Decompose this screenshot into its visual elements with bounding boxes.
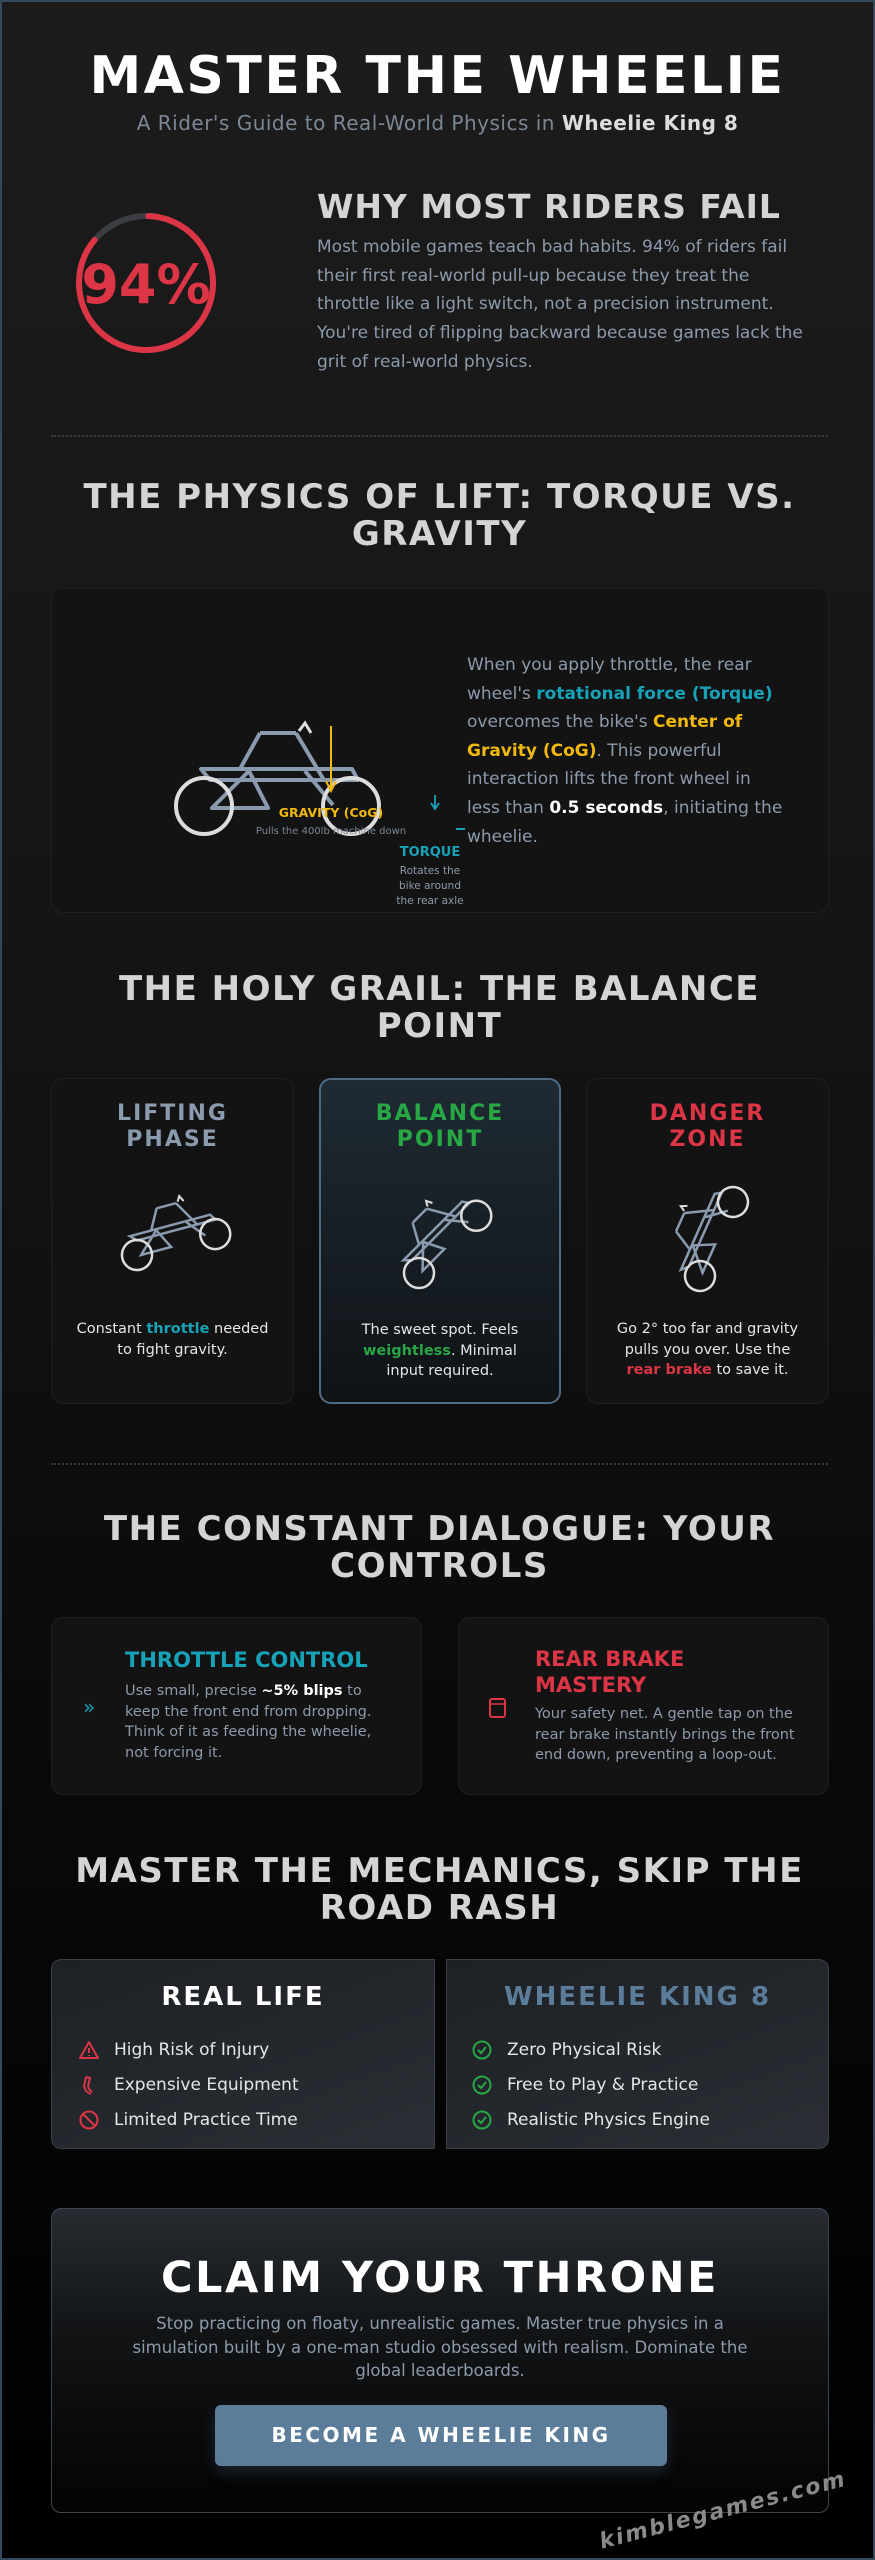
panel: CTA	[51, 2208, 829, 2513]
card text: Constant throttle needed to fight gravity.	[77, 1321, 268, 1358]
heading: master the mechanics: ROAD RASH	[320, 1888, 559, 1928]
arrow: torque: bike around	[399, 880, 461, 892]
arrow: gravity: Pulls the 400lb machine down	[256, 826, 406, 837]
panel: rear brake: Your safety net. A gentle tap on the rear brake instantly brings the front end down, preventing a loop-out.	[535, 1706, 795, 1763]
panel: danger zone	[586, 1078, 829, 1404]
text: physics explanation: When you apply throttle, the rear wheel's rotational force (Torque) overcomes the bike's Center of Gravity (CoG). This powerful interaction lifts the front wheel in less than 0.5 seconds, initiating the wheelie.	[467, 655, 782, 847]
heading: physics of lift	[83, 477, 796, 554]
title: MASTER THE WHEELIE	[89, 46, 786, 106]
arrow: torque: TORQUE	[400, 845, 460, 860]
stat ring 94%	[76, 213, 216, 353]
icon: chevrons: »	[83, 1695, 95, 1719]
panel: danger zone: DANGER	[650, 1101, 765, 1126]
panel: wheelie king 8	[446, 1959, 829, 2149]
heading: holy grail	[119, 969, 760, 1046]
heading: holy grail: POINT	[377, 1006, 502, 1046]
list: real life: Limited Practice Time	[114, 2110, 298, 2130]
diagram: bike with forces	[174, 720, 465, 907]
heading: physics of lift: GRAVITY	[352, 514, 527, 554]
card title	[117, 1101, 228, 1152]
list: wheelie king: Free to Play & Practice	[507, 2074, 698, 2094]
watermark: kimblegames.com	[597, 2467, 849, 2555]
list: real life: High Risk of Injury	[114, 2040, 269, 2060]
icon: brake	[489, 1698, 506, 1718]
button	[215, 2405, 667, 2466]
list: wheelie king: Realistic Physics Engine	[507, 2110, 710, 2130]
arrow: gravity	[256, 726, 406, 837]
panel: real life: REAL LIFE	[161, 1982, 325, 2012]
icon: bike lifting	[120, 1194, 232, 1272]
panel: lifting phase	[51, 1078, 294, 1404]
panel: physics	[51, 588, 829, 913]
heading: holy grail: THE HOLY GRAIL: THE BALANCE	[119, 969, 760, 1009]
heading: master the mechanics: MASTER THE MECHANICS, SKIP THE	[75, 1851, 804, 1891]
heading: constant dialogue: CONTROLS	[330, 1546, 549, 1586]
heading: constant dialogue	[104, 1509, 775, 1586]
arrow: torque	[396, 795, 465, 907]
card title: PHASE	[126, 1127, 219, 1152]
panel: rear brake	[458, 1617, 829, 1795]
panel: real life	[51, 1959, 435, 2149]
list: real life: Expensive Equipment	[114, 2074, 299, 2094]
panel: rear brake: MASTERY	[535, 1673, 646, 1697]
CTA heading: CLAIM YOUR THRONE	[161, 2253, 719, 2303]
panel: danger zone: Go 2° too far and gravity pulls you over. Use the rear brake to save it.	[617, 1321, 798, 1378]
panel: balance point	[319, 1078, 561, 1404]
icon: bike balanced	[400, 1199, 492, 1290]
text: why fail paragraph: Most mobile games teach bad habits. 94% of riders fail their first real-world pull-up because they treat the throttle like a light switch, not a precision instrument. You're tired of flipping backward because games lack the grit of real-world physics.	[317, 237, 803, 372]
heading: why most riders fail: WHY MOST RIDERS FAIL	[317, 187, 781, 226]
heading: constant dialogue: THE CONSTANT DIALOGUE: YOUR	[104, 1509, 775, 1549]
panel: danger zone: ZONE	[669, 1127, 746, 1152]
arrow: gravity: GRAVITY (CoG)	[279, 805, 383, 820]
list: wheelie king: Zero Physical Risk	[507, 2040, 661, 2060]
list: real life	[79, 2040, 299, 2130]
heading: physics of lift: THE PHYSICS OF LIFT: TORQUE VS.	[83, 477, 796, 517]
panel: balance point: POINT	[397, 1127, 483, 1152]
stat ring 94%: 94%	[81, 253, 211, 316]
panel: rear brake: REAR BRAKE	[535, 1647, 684, 1671]
arrow: torque: Rotates the	[400, 865, 460, 877]
list: wheelie king	[472, 2040, 710, 2130]
card title: LIFTING	[117, 1101, 228, 1126]
panel: throttle control	[51, 1617, 422, 1795]
arrow: torque: the rear axle	[396, 895, 464, 907]
heading: master the mechanics	[75, 1851, 804, 1928]
panel: balance point: The sweet spot. Feels weightless. Minimal input required.	[362, 1322, 518, 1379]
button: BECOME A WHEELIE KING	[271, 2423, 611, 2447]
icon: bike too far	[675, 1186, 750, 1292]
card title: THROTTLE CONTROL	[125, 1648, 368, 1672]
subtitle: A Rider's Guide to Real-World Physics in Wheelie King 8	[137, 111, 738, 135]
card text: Use small, precise ~5% blips to keep the front end from dropping. Think of it as feeding the wheelie, not forcing it.	[125, 1683, 371, 1760]
panel: wheelie king 8: WHEELIE KING 8	[504, 1982, 771, 2012]
CTA text: Stop practicing on floaty, unrealistic games. Master true physics in a simulation built by a one-man studio obsessed with realism. Dominate the global leaderboards.	[132, 2314, 748, 2380]
panel: balance point: BALANCE	[376, 1101, 504, 1126]
